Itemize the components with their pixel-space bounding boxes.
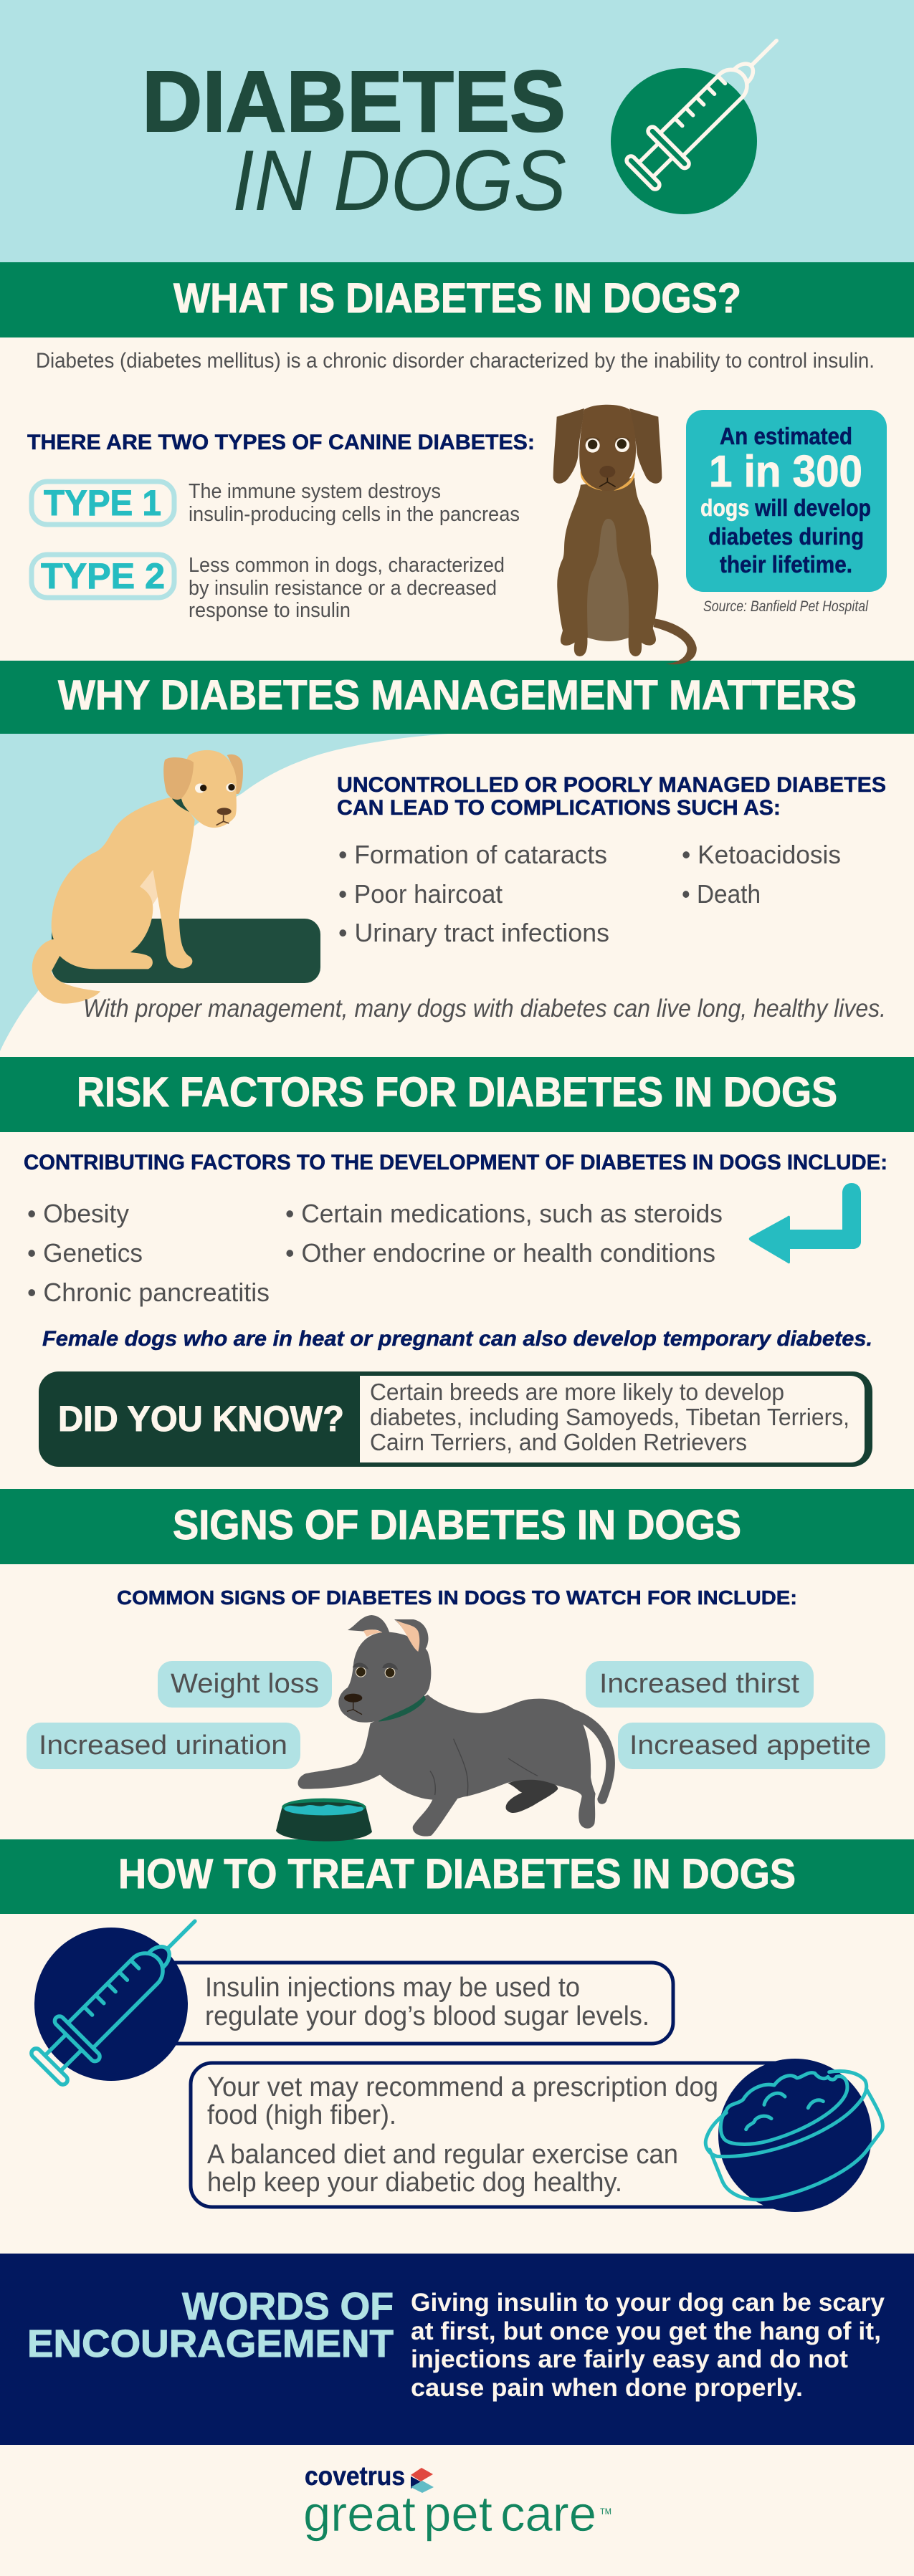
list: risk factors: • Other endocrine or health conditions [285, 1238, 715, 1268]
callout: 1 in 300 statistic: dogs will develop [700, 494, 871, 521]
list: complications: • Poor haircoat [338, 879, 503, 909]
panel: type 2: by insulin resistance or a decreased [189, 577, 497, 600]
callout: 1 in 300 statistic: their lifetime. [720, 551, 852, 578]
logo: covetrus great pet care: covetrus [305, 2461, 405, 2491]
panel: diet and exercise: help keep your diabetic dog healthy. [207, 2168, 622, 2198]
panel: type 1: TYPE 1 [44, 483, 161, 523]
illustration: brown dog [553, 405, 697, 664]
list: complications: • Death [682, 879, 761, 909]
list: complications: • Ketoacidosis [682, 840, 841, 869]
heading band: risk factors: RISK FACTORS FOR DIABETES IN DOGS [77, 1069, 837, 1116]
list: complications: • Urinary tract infections [338, 918, 609, 947]
label: weight loss [158, 1661, 332, 1708]
panel: words of encouragement: ENCOURAGEMENT [27, 2322, 394, 2365]
panel: words of encouragement: WORDS OF [182, 2285, 394, 2328]
panel: words of encouragement [0, 2254, 914, 2445]
callout: did you know: Certain breeds are more likely to develop [370, 1379, 784, 1405]
heading band: why management matters: WHY DIABETES MANAGEMENT MATTERS [58, 672, 857, 719]
heading band: signs: SIGNS OF DIABETES IN DOGS [173, 1502, 741, 1548]
icon: teal syringe on navy circle [25, 1900, 216, 2091]
illustration: tan dog on mat [32, 750, 320, 1004]
list: complications: • Formation of cataracts [338, 840, 607, 869]
heading: contributing factors: CONTRIBUTING FACTORS TO THE DEVELOPMENT OF DIABETES IN DOGS INCLUDE: [24, 1151, 887, 1174]
callout: 1 in 300 statistic: 1 in 300 [709, 447, 862, 497]
callout: did you know [39, 1371, 872, 1467]
panel: title header [0, 0, 914, 263]
panel: insulin injections: Insulin injections may be used to [205, 1973, 580, 2003]
panel: words of encouragement: at first, but once you get the hang of it, [411, 2317, 881, 2345]
list: risk factors: • Chronic pancreatitis [27, 1278, 270, 1307]
panel: type 2 [32, 554, 505, 622]
heading: complications: UNCONTROLLED OR POORLY MANAGED DIABETES [337, 773, 886, 797]
label: increased thirst: Increased thirst [599, 1669, 799, 1699]
panel: words of encouragement: cause pain when done properly. [411, 2374, 803, 2402]
arrow: teal return arrow [749, 1183, 861, 1263]
callout: did you know: diabetes, including Samoyeds, Tibetan Terriers, [370, 1404, 849, 1430]
callout: 1 in 300 statistic: diabetes during [708, 523, 864, 550]
logo: covetrus great pet care: TM [600, 2506, 611, 2517]
heading band: how to treat: HOW TO TREAT DIABETES IN DOGS [118, 1851, 796, 1897]
label: increased appetite: Increased appetite [629, 1730, 871, 1761]
label: increased appetite [618, 1723, 885, 1769]
panel: diet and exercise: Your vet may recommend a prescription dog [207, 2072, 718, 2102]
text block: female dogs note: Female dogs who are in heat or pregnant can also develop temporary diabetes. [42, 1327, 872, 1351]
heading band: signs [0, 1489, 914, 1564]
heading band: risk factors [0, 1057, 914, 1132]
heading band: why management matters [0, 661, 914, 734]
list: risk factors: • Obesity [27, 1199, 129, 1228]
title: In Dogs: IN DOGS [232, 133, 566, 229]
heading: complications: CAN LEAD TO COMPLICATIONS SUCH AS: [337, 796, 781, 820]
panel: insulin injections: regulate your dog’s blood sugar levels. [205, 2001, 649, 2031]
list: risk factors [27, 1199, 723, 1307]
callout: 1 in 300 statistic [686, 410, 887, 592]
list: complications [338, 840, 841, 947]
logo: covetrus great pet care [303, 2461, 611, 2542]
panel: insulin injections [143, 1963, 673, 2044]
logo: covetrus great pet care: great pet care [303, 2486, 596, 2542]
label: weight loss: Weight loss [171, 1669, 319, 1699]
title: Diabetes: DIABETES [142, 52, 566, 150]
label: increased urination [27, 1723, 300, 1769]
heading band: how to treat [0, 1839, 914, 1914]
illustration: gray dog with bowl [276, 1615, 615, 1842]
source note: Source: Banfield Pet Hospital [703, 598, 869, 615]
panel: words of encouragement: injections are fairly easy and do not [411, 2345, 848, 2373]
panel: management background curve [0, 734, 448, 1051]
heading band: what is diabetes [0, 262, 914, 337]
callout: 1 in 300 statistic: An estimated [720, 423, 852, 449]
panel: type 1: The immune system destroys [189, 480, 441, 503]
panel: type 2: Less common in dogs, characterized [189, 554, 505, 577]
list: risk factors: • Certain medications, such as steroids [285, 1199, 723, 1228]
label: increased thirst [586, 1661, 814, 1708]
list: risk factors: • Genetics [27, 1238, 143, 1268]
icon: food bowl on navy circle [705, 2059, 882, 2212]
heading: two types: THERE ARE TWO TYPES OF CANINE DIABETES: [27, 431, 535, 454]
panel: type 2: response to insulin [189, 599, 351, 622]
callout: did you know: DID YOU KNOW? [58, 1399, 344, 1439]
panel: words of encouragement: Giving insulin to your dog can be scary [411, 2289, 885, 2317]
panel: type 2: TYPE 2 [41, 556, 165, 596]
panel: diet and exercise: food (high fiber). [207, 2100, 396, 2130]
panel: diet and exercise: A balanced diet and regular exercise can [207, 2140, 678, 2170]
panel: type 1: insulin-producing cells in the pancreas [189, 503, 520, 526]
panel: diet and exercise [191, 2063, 822, 2207]
heading: common signs: COMMON SIGNS OF DIABETES IN DOGS TO WATCH FOR INCLUDE: [117, 1586, 797, 1609]
label: increased urination: Increased urination [39, 1730, 287, 1761]
heading: complications [337, 773, 886, 820]
callout: did you know: Cairn Terriers, and Golden Retrievers [370, 1429, 747, 1455]
heading band: what is diabetes: WHAT IS DIABETES IN DOGS? [173, 275, 741, 322]
panel: type 1 [32, 480, 520, 526]
icon: syringe in green circle [611, 21, 796, 214]
